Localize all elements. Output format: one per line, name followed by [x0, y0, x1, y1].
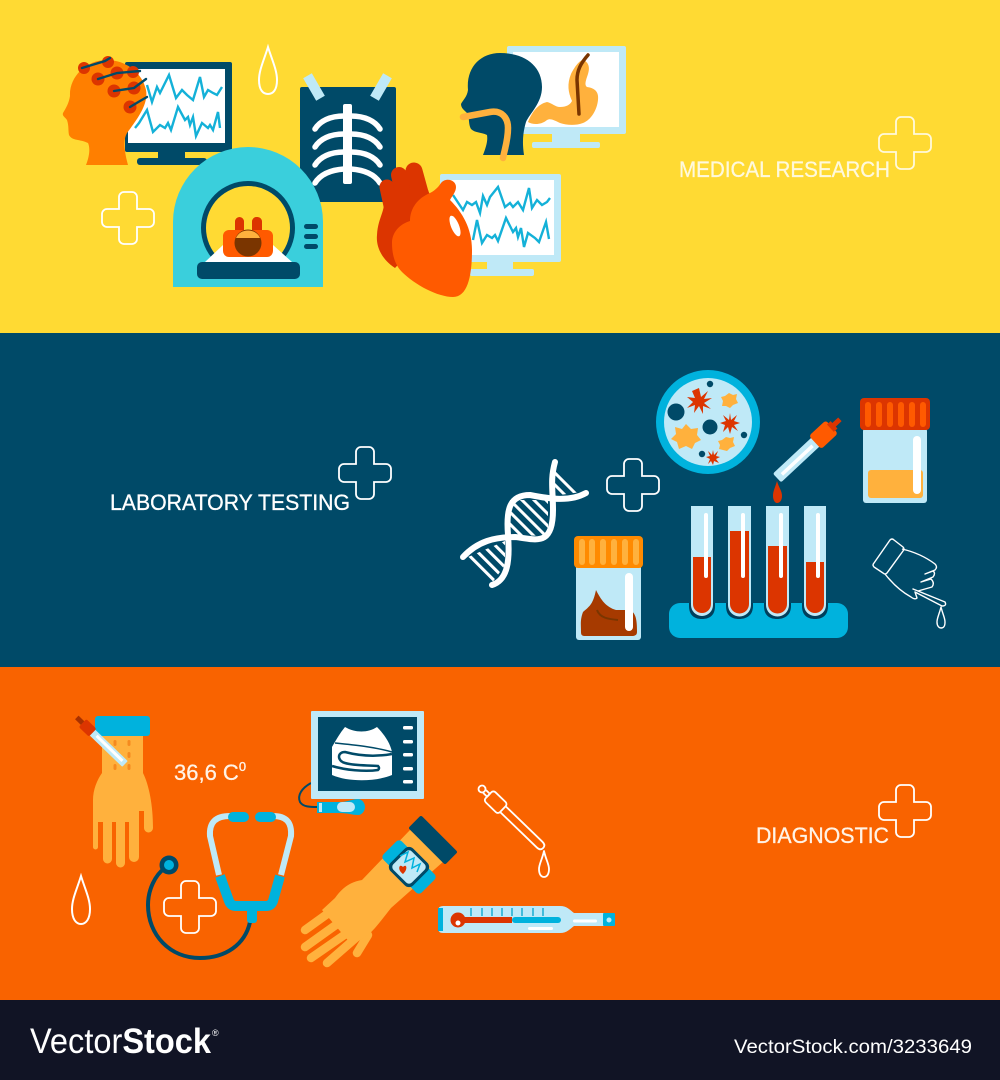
icon: cardiogram monitor — [440, 174, 561, 276]
logo: VectorStock: VectorStock — [30, 1022, 211, 1061]
icon: plus outline — [339, 447, 391, 499]
icon: stomach monitor — [507, 46, 626, 148]
icon: urine sample jar — [860, 398, 930, 503]
icon: heart — [377, 171, 472, 297]
icon: petri dish — [656, 370, 760, 474]
icon: plus outline — [102, 192, 154, 244]
panel: diagnostic — [0, 667, 1000, 1000]
icon: pipette with blood drop — [771, 413, 846, 503]
icon: stethoscope — [148, 812, 291, 958]
registered mark: ® — [212, 1028, 219, 1038]
icon: chest x-ray — [300, 73, 396, 202]
heading: medical research: MEDICAL RESEARCH — [679, 157, 890, 182]
icon: plus outline — [879, 785, 931, 837]
icon: test tube rack — [669, 506, 848, 638]
image id: VectorStock.com/3233649 — [734, 1037, 972, 1058]
icon: hand outline with drop — [873, 539, 946, 628]
temperature label: 36,6 C — [174, 760, 239, 785]
icon: water drop — [72, 876, 90, 924]
icon: thermometer — [438, 906, 615, 933]
icon: plus outline — [879, 117, 931, 169]
temperature label: 0 — [239, 759, 246, 774]
icon: head with electrodes — [63, 56, 147, 165]
icon: stool sample jar — [574, 536, 643, 640]
heading: diagnostic: DIAGNOSTIC — [756, 823, 889, 848]
panel: laboratory testing — [0, 333, 1000, 667]
icon: pipette outline with drop — [475, 782, 549, 877]
icon: hand with cuff and pipette — [73, 714, 153, 868]
icon: EEG monitor — [125, 62, 232, 165]
icon: DNA helix — [463, 462, 586, 585]
icon: plus outline — [607, 459, 659, 511]
heading: laboratory testing: LABORATORY TESTING — [110, 490, 350, 515]
icon: water drop — [259, 47, 277, 94]
icon: ultrasound monitor — [299, 711, 424, 815]
icon: plus outline — [164, 881, 216, 933]
panel: medical research — [0, 0, 1000, 333]
icon: head with endoscope tube — [461, 53, 542, 158]
footer: watermark bar — [0, 1000, 1000, 1080]
icon: hand with smartwatch — [305, 815, 458, 963]
icon: MRI scanner — [173, 147, 323, 287]
